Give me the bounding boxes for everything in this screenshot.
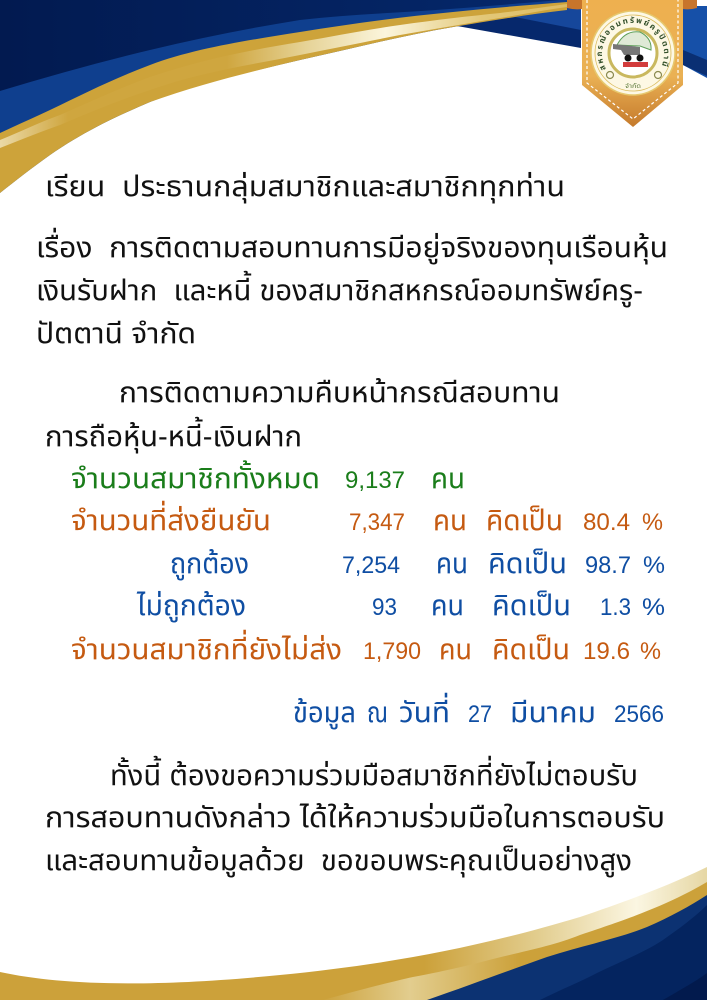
- stat: incorrect: [136, 590, 665, 623]
- data date: วันที่: [399, 692, 450, 729]
- stat: confirmed: %: [642, 509, 663, 536]
- logo circular name: สหกรณ์ออมทรัพย์ครูปัตตานี: [598, 16, 668, 70]
- data date: ณ: [367, 697, 388, 729]
- stat: total members: คน: [431, 463, 465, 495]
- stat: incorrect: คิดเป็น: [492, 590, 571, 622]
- data date: 2566: [614, 701, 664, 728]
- stat: not yet submitted: [71, 629, 661, 666]
- stat: correct: คน: [436, 548, 468, 580]
- progress heading: การติดตามความคืบหน้ากรณีสอบทาน: [119, 377, 560, 409]
- stat: correct: คิดเป็น: [488, 548, 567, 580]
- data date: [293, 692, 664, 730]
- stat: total members: [71, 460, 465, 495]
- logo cannon: [613, 44, 648, 67]
- stat: confirmed: คิดเป็น: [486, 505, 563, 537]
- data date: 27: [468, 701, 492, 728]
- closing paragraph: และสอบทานข้อมูลด้วย ขอขอบพระคุณเป็นอย่างสูง: [45, 845, 632, 878]
- closing paragraph: [45, 755, 665, 878]
- subject paragraph: ปัตตานี จำกัด: [36, 318, 196, 350]
- stat: incorrect: %: [642, 594, 665, 621]
- subject paragraph: [36, 227, 668, 350]
- stat: not yet submitted: 19.6: [583, 638, 630, 665]
- stat: correct: 7,254: [342, 552, 400, 579]
- stat: confirmed: 7,347: [349, 509, 405, 536]
- stat: correct: [170, 548, 665, 581]
- stat: incorrect: ไม่ถูกต้อง: [136, 590, 246, 623]
- stat: confirmed: คน: [433, 505, 467, 537]
- badge ribbon with logo: [567, 0, 697, 127]
- stat: total members: 9,137: [345, 467, 405, 494]
- stat: correct: 98.7: [585, 552, 631, 579]
- stat: total members: จำนวนสมาชิกทั้งหมด: [71, 460, 320, 495]
- stat: not yet submitted: คิดเป็น: [492, 634, 570, 666]
- logo bottom label: จำกัด: [625, 82, 641, 90]
- stat: incorrect: คน: [431, 590, 464, 622]
- bottom wave decoration: [0, 867, 707, 1000]
- stat: incorrect: 1.3: [600, 594, 631, 621]
- stat: not yet submitted: 1,790: [363, 638, 421, 665]
- stat: confirmed: จำนวนที่ส่งยืนยัน: [71, 500, 271, 537]
- stat: correct: %: [643, 552, 665, 579]
- top wave decoration: [0, 0, 707, 193]
- closing paragraph: ทั้งนี้ ต้องขอความร่วมมือสมาชิกที่ยังไม่ตอบรับ: [110, 755, 638, 792]
- progress heading: การถือหุ้น-หนี้-เงินฝาก: [45, 416, 302, 453]
- salutation line: เรียน ประธานกลุ่มสมาชิกและสมาชิกทุกท่าน: [45, 171, 565, 203]
- progress heading: [45, 377, 560, 453]
- stat: incorrect: 93: [372, 594, 397, 621]
- subject paragraph: เงินรับฝาก และหนี้ ของสมาชิกสหกรณ์ออมทรัพย์ครู-: [36, 270, 643, 308]
- stat: confirmed: [71, 500, 663, 537]
- stat: not yet submitted: จำนวนสมาชิกที่ยังไม่ส่ง: [71, 629, 342, 666]
- subject paragraph: เรื่อง การติดตามสอบทานการมีอยู่จริงของทุนเรือนหุ้น: [36, 227, 668, 265]
- stat: confirmed: 80.4: [583, 509, 630, 536]
- stat: correct: ถูกต้อง: [170, 548, 249, 581]
- stat: not yet submitted: %: [640, 638, 661, 665]
- data date: ข้อมูล: [293, 697, 356, 730]
- stat: not yet submitted: คน: [439, 634, 472, 666]
- closing paragraph: การสอบทานดังกล่าว ได้ให้ความร่วมมือในการตอบรับ: [45, 802, 665, 834]
- data date: มีนาคม: [510, 697, 596, 729]
